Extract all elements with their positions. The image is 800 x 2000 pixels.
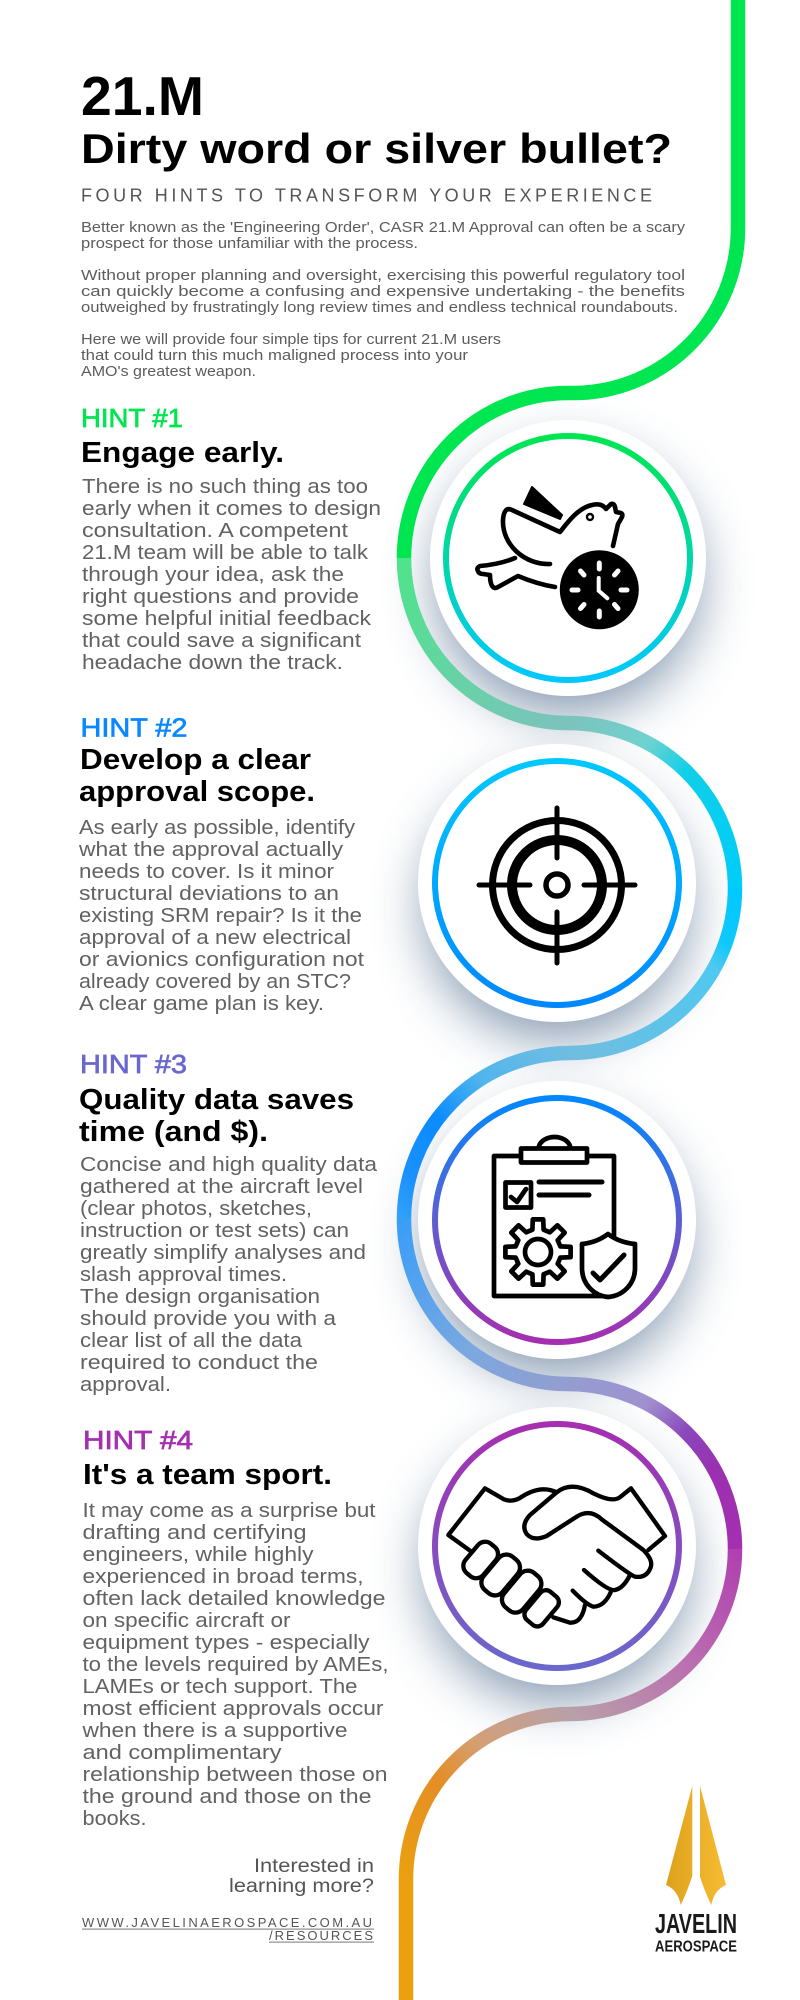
hint 3 body: (clear photos, sketches, xyxy=(80,1198,312,1220)
icon: javelin blades xyxy=(666,1786,726,1905)
callout: interested in learning more: learning more? xyxy=(229,1876,374,1897)
panel: hint 3 xyxy=(79,1049,378,1396)
hint 2 label: HINT #2 xyxy=(80,712,188,742)
hint 2 heading xyxy=(79,744,315,808)
hint 1 body: right questions and provide xyxy=(82,586,359,608)
hint 3 body: should provide you with a xyxy=(80,1308,337,1330)
heading: Dirty word or silver bullet?: Dirty word or silver bullet? xyxy=(81,125,672,172)
hint 1 body: that could save a significant xyxy=(82,630,362,652)
hint 4 label: HINT #4 xyxy=(83,1425,193,1455)
intro text block: outweighed by frustratingly long review times and endless technical roundabouts. xyxy=(81,299,678,316)
hint 2 heading: approval scope. xyxy=(79,776,315,808)
hint 4 body: books. xyxy=(82,1808,146,1830)
circle 4: handshake icon xyxy=(418,1407,696,1685)
hint 4 body: often lack detailed knowledge xyxy=(82,1588,386,1610)
icon: clipboard with gear and shield xyxy=(494,1137,635,1297)
hint 3 body: gathered at the aircraft level xyxy=(80,1176,363,1198)
hint 1 body: headache down the track. xyxy=(82,652,343,674)
hint 4 body: to the levels required by AMEs, xyxy=(82,1654,388,1676)
icon: bird with clock xyxy=(477,487,639,629)
hint 2 body: or avionics configuration not xyxy=(79,949,364,971)
hint 4 body xyxy=(81,1500,389,1830)
hint 2 body: what the approval actually xyxy=(78,839,343,861)
hint 2 body xyxy=(78,817,364,1015)
hint 2 body: structural deviations to an xyxy=(79,883,339,905)
website link xyxy=(82,1915,374,1943)
hint 3 body: approval. xyxy=(80,1374,171,1396)
hint 2 body: already covered by an STC? xyxy=(79,971,351,993)
hint 2 body: As early as possible, identify xyxy=(79,817,355,839)
intro text block: Without proper planning and oversight, exercising this powerful regulatory tool xyxy=(81,267,685,284)
hint 1 heading: Engage early. xyxy=(81,437,284,469)
hint 4 body: It may come as a surprise but xyxy=(82,1500,376,1522)
hint 1 body: consultation. A competent xyxy=(82,520,349,542)
hint 3 body: Concise and high quality data xyxy=(80,1154,378,1176)
hint 4 body: most efficient approvals occur xyxy=(82,1698,384,1720)
hint 3 body xyxy=(80,1154,378,1396)
hint 2 body: needs to cover. Is it minor xyxy=(79,861,334,883)
logo: Javelin Aerospace: AEROSPACE xyxy=(655,1938,737,1956)
intro text block: Here we will provide four simple tips for current 21.M users xyxy=(81,331,501,348)
hint 4 body: on specific aircraft or xyxy=(82,1610,291,1632)
intro text block: AMO's greatest weapon. xyxy=(81,363,256,380)
website link: WWW.JAVELINAEROSPACE.COM.AU xyxy=(82,1915,372,1930)
hint 4 body: and complimentary xyxy=(82,1742,282,1764)
hint 3 heading xyxy=(79,1084,354,1148)
hint 4 body: LAMEs or tech support. The xyxy=(82,1676,358,1698)
logo: Javelin Aerospace xyxy=(655,1786,737,1956)
hint 4 heading: It's a team sport. xyxy=(83,1459,332,1491)
hint 4 body: engineers, while highly xyxy=(82,1544,314,1566)
hint 3 label: HINT #3 xyxy=(80,1049,187,1079)
intro text block xyxy=(81,219,686,380)
hint 3 body: clear list of all the data xyxy=(80,1330,303,1352)
hint 2 heading: Develop a clear xyxy=(80,744,311,776)
panel: hint 4 xyxy=(81,1425,389,1830)
callout: interested in learning more xyxy=(229,1856,374,1897)
circle 3: clipboard icon xyxy=(418,1081,696,1359)
hint 2 body: approval of a new electrical xyxy=(79,927,351,949)
hint 4 body: equipment types - especially xyxy=(82,1632,370,1654)
hint 4 body: drafting and certifying xyxy=(82,1522,306,1544)
website link: /RESOURCES xyxy=(269,1928,373,1943)
panel: hint 1 xyxy=(81,403,381,674)
hint 4 body: the ground and those on the xyxy=(82,1786,372,1808)
hint 1 body: There is no such thing as too xyxy=(82,476,368,498)
hint 3 body: instruction or test sets) can xyxy=(80,1220,349,1242)
hint 3 heading: time (and $). xyxy=(79,1116,268,1148)
hint 3 body: greatly simplify analyses and xyxy=(80,1242,366,1264)
intro text block: prospect for those unfamiliar with the process. xyxy=(81,235,418,252)
winding gradient timeline path xyxy=(404,0,738,2000)
circle 1: early bird icon xyxy=(430,420,706,696)
icon: crosshair target xyxy=(479,808,635,963)
intro text block: Better known as the 'Engineering Order', CASR 21.M Approval can often be a scary xyxy=(81,219,686,236)
intro text block: can quickly become a confusing and expensive undertaking - the benefits xyxy=(81,283,685,300)
callout: interested in learning more: Interested in xyxy=(254,1856,374,1877)
panel: hint 2 xyxy=(78,712,364,1015)
hint 2 body: A clear game plan is key. xyxy=(79,993,324,1015)
hint 2 body: existing SRM repair? Is it the xyxy=(79,905,362,927)
hint 1 label: HINT #1 xyxy=(81,403,183,433)
hint 3 body: The design organisation xyxy=(80,1286,320,1308)
hint 3 body: required to conduct the xyxy=(80,1352,318,1374)
hint 4 body: when there is a supportive xyxy=(81,1720,348,1742)
hint 4 body: experienced in broad terms, xyxy=(82,1566,364,1588)
hint 1 body: 21.M team will be able to talk xyxy=(82,542,369,564)
hint 3 body: slash approval times. xyxy=(80,1264,287,1286)
hint 1 body: some helpful initial feedback xyxy=(82,608,372,630)
hint 1 body: early when it comes to design xyxy=(82,498,381,520)
intro text block: that could turn this much maligned process into your xyxy=(81,347,468,364)
hint 1 body: through your idea, ask the xyxy=(82,564,344,586)
hint 3 heading: Quality data saves xyxy=(79,1084,354,1116)
disc drop shadows xyxy=(425,450,700,1702)
circle 2: target icon xyxy=(418,744,696,1022)
icon: handshake xyxy=(448,1487,665,1629)
logo wordmark: JAVELIN xyxy=(655,1908,737,1939)
hint 1 body xyxy=(82,476,381,674)
subtitle: FOUR HINTS TO TRANSFORM YOUR EXPERIENCE xyxy=(81,186,652,206)
title: 21.M: 21.M xyxy=(81,65,204,127)
hint 4 body: relationship between those on xyxy=(82,1764,388,1786)
